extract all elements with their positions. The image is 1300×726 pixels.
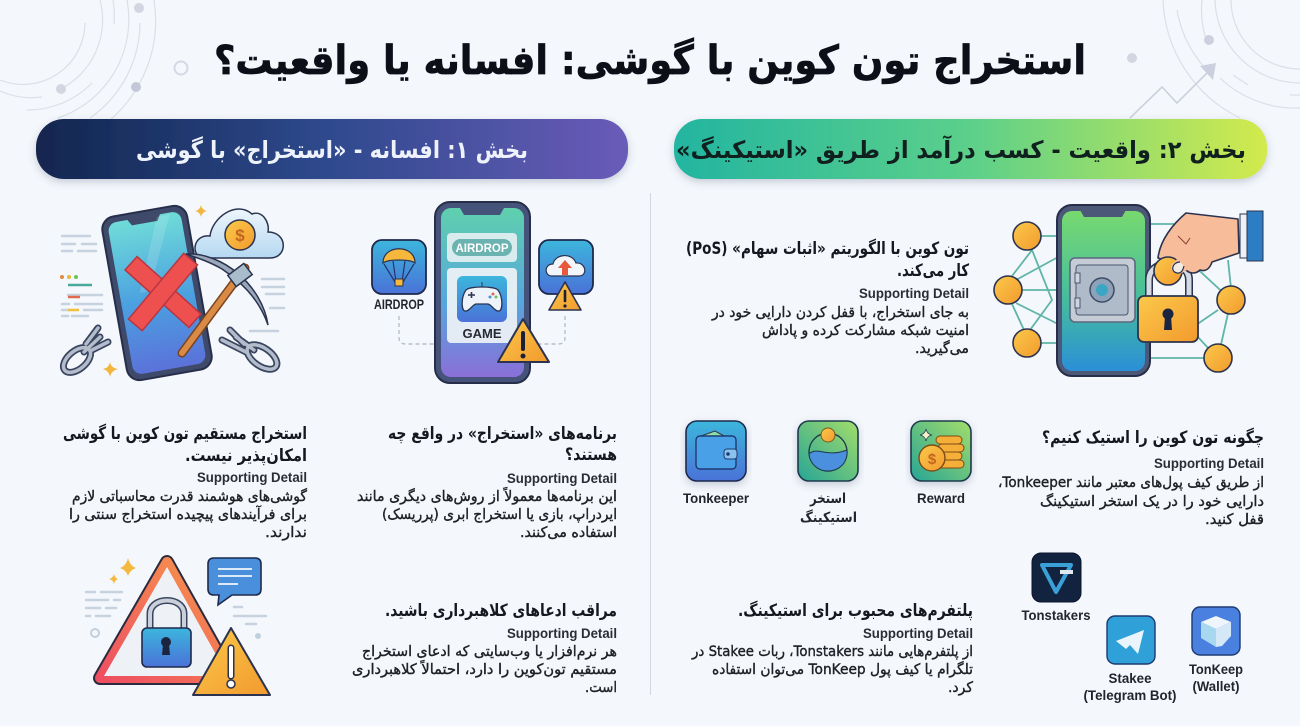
coin nodes xyxy=(994,222,1245,372)
text block: what are mining apps: Supporting Detail xyxy=(507,470,617,486)
illustration: staking phone with vault xyxy=(994,205,1263,376)
network lines xyxy=(1012,224,1231,358)
phone xyxy=(1057,205,1150,376)
text block: what are mining apps: ایردراپ، بازی یا استخراج ابری (پرریسک) xyxy=(382,507,617,524)
text block: direct mining impossible: گوشی‌های هوشمند قدرت محاسباتی لازم xyxy=(72,488,307,505)
game card xyxy=(447,268,517,343)
banner: part 2 reality xyxy=(674,119,1267,179)
text block: popular platforms: پلتفرم‌های محبوب برای استیکینگ. xyxy=(738,600,973,621)
column divider xyxy=(650,193,651,695)
broken chains xyxy=(59,328,281,377)
text block: direct mining impossible: ندارند. xyxy=(265,525,307,541)
code lines xyxy=(60,236,284,331)
icon: staking pool xyxy=(798,421,858,481)
text block: what are mining apps: استفاده می‌کنند. xyxy=(520,525,617,541)
icon: Tonkeeper wallet xyxy=(686,421,746,481)
label: TonKeep xyxy=(1189,661,1243,694)
phone xyxy=(100,204,214,382)
text block: scam warning: است. xyxy=(585,680,617,696)
label: staking pool xyxy=(800,491,857,526)
icon: reward coins xyxy=(911,421,971,481)
sparkles xyxy=(195,205,207,217)
text block: scam warning: مستقیم تون‌کوین را دارد، احتمالاً کلاهبرداری xyxy=(352,660,617,678)
warning xyxy=(193,628,270,695)
lock xyxy=(142,600,191,667)
icon: Tonstakers xyxy=(1032,553,1081,602)
red x xyxy=(125,253,201,331)
text block: direct mining impossible: استخراج مستقیم تون کوین با گوشی xyxy=(63,423,307,444)
icon: TonKeep wallet xyxy=(1192,607,1240,655)
text block: scam warning: هر نرم‌افزار یا وب‌سایتی که ادعای استخراج xyxy=(362,644,617,661)
text block: PoS: به جای استخراج، با قفل کردن دارایی خود در xyxy=(711,305,969,322)
text block: direct mining impossible: Supporting Detail xyxy=(197,469,307,485)
airdrop card xyxy=(447,233,517,262)
label: staking pool: استیکینگ xyxy=(800,509,857,526)
label: Stakee xyxy=(1084,670,1176,703)
parachute icon xyxy=(372,240,426,294)
decoration: top-left orbit arcs xyxy=(0,0,188,120)
phone xyxy=(435,202,530,383)
text block: how to stake: قفل کنید. xyxy=(1205,512,1264,528)
text block: popular platforms xyxy=(691,600,973,696)
text block: PoS: تون کوین با الگوریتم «اثبات سهام» (PoS) xyxy=(686,238,969,259)
label: Stakee: (Telegram Bot) xyxy=(1084,687,1176,703)
text block: PoS: کار می‌کند. xyxy=(897,261,969,281)
text block: PoS xyxy=(686,238,969,357)
text block: what are mining apps xyxy=(357,424,617,541)
cloud with coin xyxy=(195,209,283,258)
airdrop card: AIRDROP xyxy=(455,243,509,255)
decoration: top-right orbit arcs and growth arrow xyxy=(1127,0,1300,118)
text block: direct mining impossible xyxy=(63,423,307,541)
warning small xyxy=(549,282,581,310)
hand with coin xyxy=(1154,211,1263,285)
padlock xyxy=(1138,264,1198,342)
speech bubble xyxy=(208,558,261,605)
label: Stakee: Stakee xyxy=(1108,670,1152,686)
label: Tonstakers: Tonstakers xyxy=(1022,607,1091,623)
label: Reward: Reward xyxy=(917,490,965,506)
dashed connectors xyxy=(399,316,565,344)
label: staking pool: استخر xyxy=(809,491,846,507)
text block: what are mining apps: این برنامه‌ها معمولاً از روش‌های دیگری مانند xyxy=(357,487,617,505)
text block: popular platforms: تلگرام یا کیف پول TonKeep می‌توان استفاده xyxy=(712,661,973,678)
text block: how to stake: از طریق کیف پول‌های معتبر مانند Tonkeeper، xyxy=(998,475,1264,491)
game card: GAME xyxy=(462,326,502,341)
banner: part 1 myth: بخش ۱: افسانه - «استخراج» با گوشی xyxy=(136,136,528,164)
cloud with coin: $ xyxy=(235,226,245,245)
banner: part 1 myth xyxy=(36,119,628,179)
text block: how to stake: دارایی خود را در یک استخر استیکینگ xyxy=(1040,492,1264,510)
safe xyxy=(1070,258,1135,322)
banner: part 2 reality: بخش ۲: واقعیت - کسب درآمد از طریق «استیکینگ» xyxy=(676,135,1246,164)
airdrop label: AIRDROP xyxy=(374,296,424,312)
text block: how to stake xyxy=(998,427,1264,528)
text block: popular platforms: Supporting Detail xyxy=(863,625,973,641)
cloud upload icon xyxy=(539,240,593,294)
label: Tonkeeper: Tonkeeper xyxy=(683,490,750,506)
illustration: airdrop and game apps xyxy=(372,202,593,383)
text block: scam warning: مراقب ادعاهای کلاهبرداری باشید. xyxy=(385,601,617,621)
text block: PoS: امنیت شبکه مشارکت کرده و پاداش xyxy=(762,323,969,339)
text block: PoS: Supporting Detail xyxy=(859,285,969,301)
text block: PoS: می‌گیرید. xyxy=(915,340,969,357)
text block: popular platforms: کرد. xyxy=(948,680,973,696)
title: استخراج تون کوین با گوشی: افسانه یا واقعیت؟ xyxy=(214,37,1086,84)
label: TonKeep: (Wallet) xyxy=(1192,678,1240,694)
text block: direct mining impossible: برای فرآیندهای پیچیده استخراج سنتی را xyxy=(69,505,307,524)
pickaxe xyxy=(182,254,268,353)
text block: what are mining apps: هستند؟ xyxy=(565,445,617,465)
illustration: broken phone mining xyxy=(59,204,284,382)
icon: Stakee telegram xyxy=(1107,616,1155,664)
label: TonKeep: TonKeep xyxy=(1189,661,1243,677)
text block: scam warning: Supporting Detail xyxy=(507,625,617,641)
text block: scam warning xyxy=(352,601,617,696)
text block: how to stake: Supporting Detail xyxy=(1154,455,1264,471)
warning large xyxy=(498,319,549,362)
icon: reward coins: $ xyxy=(928,451,937,468)
illustration: scam warning triangle xyxy=(86,558,270,695)
text block: popular platforms: از پلتفرم‌هایی مانند Tonstakers، ربات Stakee در xyxy=(691,644,973,660)
text block: direct mining impossible: امکان‌پذیر نیست. xyxy=(185,446,307,466)
text block: what are mining apps: برنامه‌های «استخراج» در واقع چه xyxy=(388,424,617,444)
